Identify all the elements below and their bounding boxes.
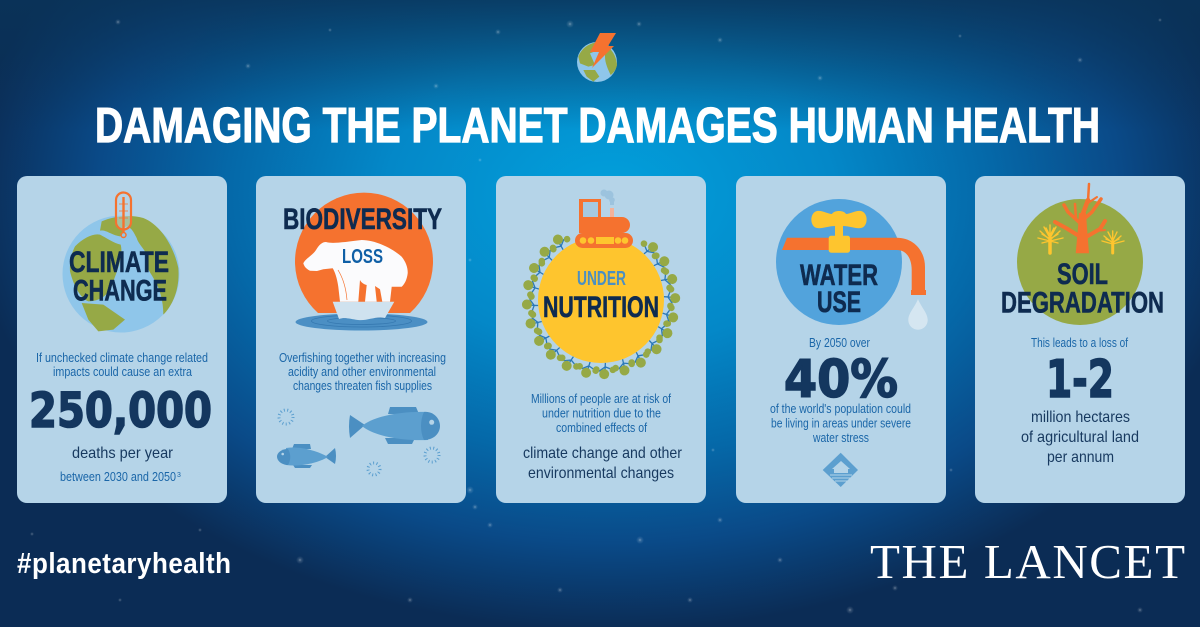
heading: climate change bbox=[69, 246, 169, 308]
text: overfishing bbox=[279, 351, 446, 393]
icon: bare orange tree bbox=[1055, 184, 1105, 253]
text: water stress: be living in areas under severe bbox=[771, 416, 911, 430]
icon: orange sun bbox=[295, 193, 433, 313]
heading: nutrition: NUTRITION bbox=[543, 291, 659, 324]
statistic: 250,000: 250,000 bbox=[29, 383, 212, 439]
text: millions at risk: Millions of people are at risk of bbox=[531, 392, 671, 406]
text: climate and environmental changes: climate change and other bbox=[523, 445, 683, 462]
heading: under: UNDER bbox=[577, 268, 626, 290]
text: climate and environmental changes: environmental changes bbox=[528, 465, 674, 482]
panel: water use bbox=[736, 176, 946, 503]
heading: soil: SOIL bbox=[1057, 258, 1108, 291]
icon: small fish bbox=[277, 444, 336, 468]
text: intro: If unchecked climate change related bbox=[36, 351, 208, 365]
text: water stress: of the world's population could bbox=[770, 402, 911, 416]
text: intro bbox=[36, 351, 208, 379]
icon: thermometer bbox=[116, 192, 131, 238]
text: leads to a loss: This leads to a loss of bbox=[1031, 336, 1128, 350]
icon: bubbles bbox=[279, 410, 439, 475]
logo: The Lancet: THE LANCET bbox=[870, 534, 1185, 589]
text: water stress: water stress bbox=[812, 431, 869, 445]
statistic: 1-2: 1-2 bbox=[1046, 350, 1114, 410]
heading: climate change: CLIMATE bbox=[69, 246, 169, 279]
text: water stress bbox=[770, 402, 911, 445]
heading: climate change: CHANGE bbox=[73, 274, 167, 308]
text: million hectares bbox=[1021, 409, 1139, 466]
panel: climate change bbox=[17, 176, 227, 503]
text: million hectares: of agricultural land bbox=[1021, 429, 1139, 446]
icon: tractor bbox=[575, 190, 633, 248]
text: million hectares: per annum bbox=[1047, 449, 1114, 466]
icon: olive circle bbox=[1017, 199, 1143, 325]
icon: flooded house diamond bbox=[823, 453, 858, 487]
footnote marker: 3 bbox=[177, 472, 181, 479]
text: million hectares: million hectares bbox=[1031, 409, 1130, 426]
panel: under nutrition bbox=[496, 176, 706, 503]
text: millions at risk bbox=[531, 392, 671, 435]
icon: planet with lightning bolt bbox=[577, 33, 617, 82]
title: DAMAGING THE PLANET DAMAGES HUMAN HEALTH bbox=[95, 99, 1100, 153]
text: overfishing: changes threaten fish supplies bbox=[293, 379, 432, 393]
icon: water ripple bbox=[296, 314, 428, 330]
icon: water drop bbox=[908, 299, 928, 330]
icon: blue circle bbox=[776, 199, 902, 325]
icon: yellow trees bbox=[1038, 225, 1124, 253]
text: overfishing: acidity and other environmental bbox=[288, 365, 436, 379]
heading: loss: LOSS bbox=[342, 246, 383, 268]
text: deaths per year: deaths per year bbox=[72, 445, 174, 462]
text: intro: impacts could cause an extra bbox=[53, 365, 192, 379]
text: millions at risk: combined effects of bbox=[556, 421, 647, 435]
text: climate and environmental changes bbox=[523, 445, 683, 482]
heading: biodiversity: BIODIVERSITY bbox=[283, 203, 442, 236]
statistic: 40%: 40% bbox=[784, 350, 898, 410]
icon: ring of plants bbox=[521, 229, 681, 380]
icon: polar bear on ice bbox=[303, 240, 408, 320]
icon: yellow globe bbox=[538, 237, 664, 363]
panel: soil degradation bbox=[975, 176, 1185, 503]
icon: globe bbox=[62, 216, 180, 332]
text: millions at risk: under nutrition due to the bbox=[542, 406, 661, 420]
icon: tap bbox=[782, 211, 926, 295]
hashtag: #planetaryhealth bbox=[17, 547, 231, 579]
text: overfishing: Overfishing together with increasing bbox=[279, 351, 446, 365]
panel: biodiversity loss bbox=[256, 176, 466, 503]
text: date range: between 2030 and 2050 bbox=[60, 470, 176, 484]
text: by 2050 over: By 2050 over bbox=[809, 336, 870, 350]
icon: large fish bbox=[349, 407, 440, 444]
heading: water: WATER bbox=[800, 259, 878, 292]
heading: use: USE bbox=[817, 286, 861, 319]
